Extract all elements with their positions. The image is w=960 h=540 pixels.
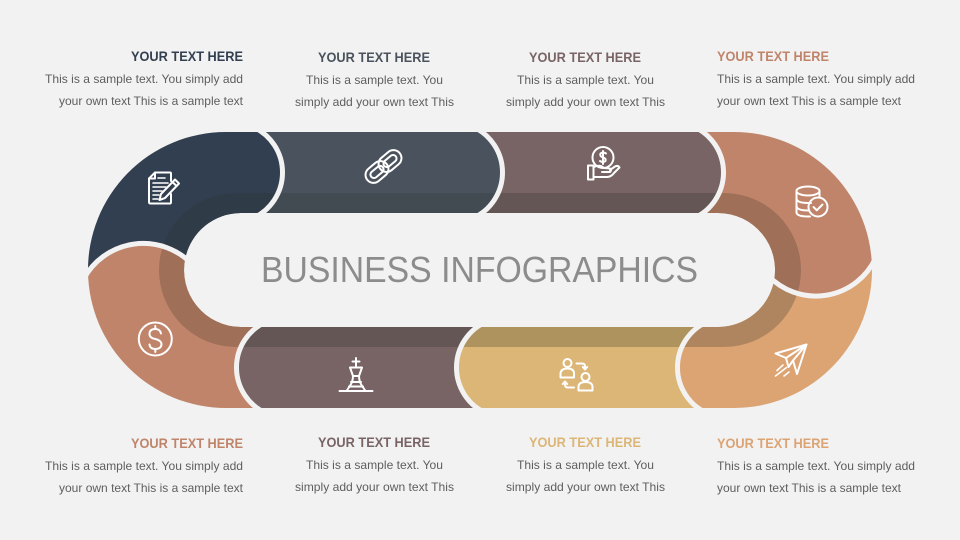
text block: top 1: your own text This is a sample text — [59, 94, 244, 108]
text block: top 1: This is a sample text. You simply add — [45, 72, 243, 86]
text block: bottom 3: YOUR TEXT HERE — [529, 434, 641, 450]
text block: top 1: YOUR TEXT HERE — [131, 48, 243, 64]
text block: top 2 — [295, 49, 454, 109]
icon: hand holding coin — [588, 147, 620, 180]
text block: top 2: YOUR TEXT HERE — [318, 49, 430, 65]
icon: database with check — [796, 186, 828, 216]
icon: chain link — [362, 147, 405, 186]
text block: bottom 3: simply add your own text This — [506, 480, 665, 494]
text block: top 2: simply add your own text This — [295, 95, 454, 109]
text block: top 3: simply add your own text This — [506, 95, 665, 109]
icon: paper plane — [776, 344, 806, 376]
segment: navy top-left — [88, 132, 280, 268]
text block: top 4: This is a sample text. You simply add — [717, 72, 915, 86]
segment: terracotta top-right — [707, 132, 872, 294]
text block: bottom 1: YOUR TEXT HERE — [131, 435, 243, 451]
segment: slate top — [266, 132, 500, 213]
text block: bottom 3 — [506, 434, 665, 494]
text block: bottom 1: This is a sample text. You simply add — [45, 459, 243, 473]
text block: bottom 4: YOUR TEXT HERE — [717, 435, 829, 451]
text block: bottom 1: your own text This is a sample text — [59, 481, 244, 495]
text block: top 3: YOUR TEXT HERE — [529, 49, 641, 65]
text block: top 2: This is a sample text. You — [306, 73, 443, 87]
text block: bottom 4: your own text This is a sample text — [717, 481, 902, 495]
text block: bottom 2: This is a sample text. You — [306, 458, 443, 472]
central ribbon diagram — [84, 126, 875, 414]
text block: top 3 — [506, 49, 665, 109]
text block: bottom 2: simply add your own text This — [295, 480, 454, 494]
text block: top 4: your own text This is a sample text — [717, 94, 902, 108]
text block: bottom 4: This is a sample text. You simply add — [717, 459, 915, 473]
icon: chess king — [340, 358, 372, 391]
icon: document and pen — [149, 172, 179, 204]
text block: bottom 2: YOUR TEXT HERE — [318, 434, 430, 450]
text block: top 4 — [717, 48, 915, 108]
icon: people exchange — [560, 359, 592, 390]
text block: bottom 3: This is a sample text. You — [517, 458, 654, 472]
text block: top 1 — [45, 48, 244, 108]
icon: dollar coin — [139, 322, 172, 356]
text block: bottom 4 — [717, 435, 915, 495]
text block: top 3: This is a sample text. You — [517, 73, 654, 87]
segment: orange bottom-right — [680, 269, 872, 408]
text block: bottom 2 — [295, 434, 454, 494]
segment: gold bottom — [459, 327, 694, 408]
segment: mauve top — [486, 132, 721, 213]
title: BUSINESS INFOGRAPHICS — [261, 249, 698, 290]
segment: mauve bottom — [239, 327, 473, 408]
text block: top 4: YOUR TEXT HERE — [717, 48, 829, 64]
text block: bottom 1 — [45, 435, 244, 495]
segment: terracotta bottom-left — [88, 246, 253, 408]
